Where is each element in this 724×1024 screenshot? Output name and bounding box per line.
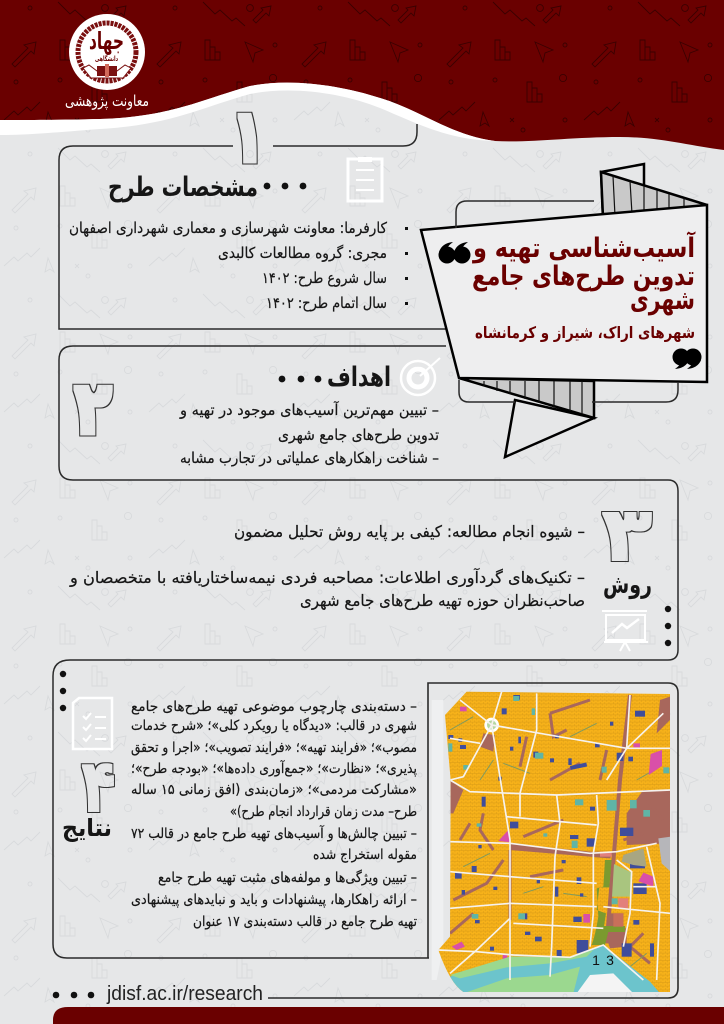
banner face: [421, 205, 707, 382]
results text: پذیری»؛ «نظارت»؛ «جمع‌آوری داده‌ها»؛ «بودجه طرح»؛: [131, 760, 417, 777]
map labels: [592, 952, 614, 968]
results text: – تبیین ویژگی‌ها و مولفه‌های مثبت تهیه طرح جامع: [158, 869, 417, 886]
title text: [471, 231, 696, 316]
goals text: – شناخت راهکارهای عملیاتی در تجارب مشابه: [180, 449, 439, 467]
bullet list: سال شروع طرح: ۱۴۰۲: [262, 269, 387, 287]
icon: checklist: [73, 698, 112, 749]
panel: map frame: [268, 683, 678, 998]
results text: – تبیین چالش‌ها و آسیب‌های تهیه طرح جامع در قالب ۷۲: [131, 825, 417, 842]
results text: شهری در قالب: «دیدگاه یا رویکرد کلی»؛ «شرح خدمات: [131, 717, 417, 734]
number 1: ۱: [233, 94, 263, 178]
bullet list: [69, 219, 408, 312]
results text: تهیه طرح جامع در قالب دسته‌بندی ۱۷ عنوان: [193, 914, 417, 930]
heading dots: [264, 183, 306, 189]
gray and green parcels: [484, 718, 671, 945]
heading dots: [279, 376, 321, 382]
number 2: ۲: [75, 366, 111, 450]
river and lower green bank: [450, 945, 660, 993]
results text: – ارائه راهکارها، پیشنهادات و باید و نبایدهای پیشنهادی: [131, 892, 417, 908]
panel: project specs: [59, 94, 446, 329]
heading: goals: اهداف: [327, 362, 391, 393]
logo: jahad daneshgahi: دانشگاهی: [95, 54, 118, 63]
land use blocks: [448, 695, 654, 957]
bullet list: سال اتمام طرح: ۱۴۰۲: [266, 294, 387, 312]
heading: method: روش: [603, 570, 652, 600]
goals text: – تبیین مهم‌ترین آسیب‌های موجود در تهیه و: [179, 401, 439, 419]
map labels: 3: [606, 952, 614, 968]
number 3: ۳: [602, 492, 652, 578]
title text: شهری: [630, 285, 695, 316]
logo: jahad daneshgahi: جهاد: [89, 27, 124, 55]
bullet list: مجری: گروه مطالعات کالبدی: [218, 244, 387, 262]
icon: target: [401, 358, 440, 395]
heading dots: [60, 671, 66, 711]
results text: مقوله استخراج شده: [313, 847, 417, 863]
number 4: ۴: [82, 744, 115, 828]
subtitle: research deputy: معاونت پژوهشی: [65, 92, 149, 111]
secondary frame behind: [456, 201, 678, 402]
goals text: تدوین طرح‌های جامع شهری: [278, 426, 439, 444]
header band: [0, 0, 724, 150]
icon: presentation board: [602, 611, 648, 651]
bullet list: کارفرما: معاونت شهرسازی و معماری شهرداری اصفهان: [69, 219, 388, 237]
title banner: [421, 164, 707, 457]
ribbon tail: [505, 400, 594, 457]
goals text: [179, 401, 439, 467]
method text: [69, 522, 585, 611]
icon: clipboard: [348, 157, 382, 201]
results text: «مشارکت مردمی»؛ «زمان‌بندی (افق زمانی ۱۵ ساله: [131, 782, 417, 798]
results text: – دسته‌بندی چارچوب موضوعی تهیه طرح‌های جامع: [131, 699, 417, 715]
footer url: jdisf.ac.ir/research: [106, 983, 263, 1005]
method text: – تکنیک‌های گردآوری اطلاعات: مصاحبه فردی نیمه‌ساختاریافته با متخصصان و: [69, 568, 585, 588]
panel: results: [53, 660, 429, 958]
method text: صاحب‌نظران حوزه تهیه طرح‌های جامع شهری: [300, 591, 585, 611]
quote close: [672, 348, 702, 369]
back ribbon top: [601, 164, 644, 220]
quote open: [438, 242, 470, 264]
heading: project specs: مشخصات طرح: [108, 172, 258, 203]
footer bar: [53, 1007, 724, 1024]
fold top: [601, 172, 707, 217]
results text: [131, 699, 417, 930]
logo: jahad daneshgahi: [69, 14, 145, 90]
white streets: [438, 692, 670, 980]
results text: مصوب»؛ «فرایند تهیه»؛ «فرایند تصویب»؛ «اجرا و تحقق: [131, 740, 417, 756]
panel: goals: [59, 346, 678, 660]
results text: طرح– مدت زمان قرارداد انجام طرح)»: [230, 804, 417, 820]
fold bottom: [459, 378, 594, 418]
map image: [430, 680, 673, 993]
panel: method: [69, 492, 671, 651]
map labels: 1: [592, 952, 600, 968]
heading: results: نتایج: [62, 814, 112, 842]
method text: – شیوه انجام مطالعه: کیفی بر پایه روش تحلیل مضمون: [234, 522, 585, 542]
heading dots: [665, 606, 671, 646]
